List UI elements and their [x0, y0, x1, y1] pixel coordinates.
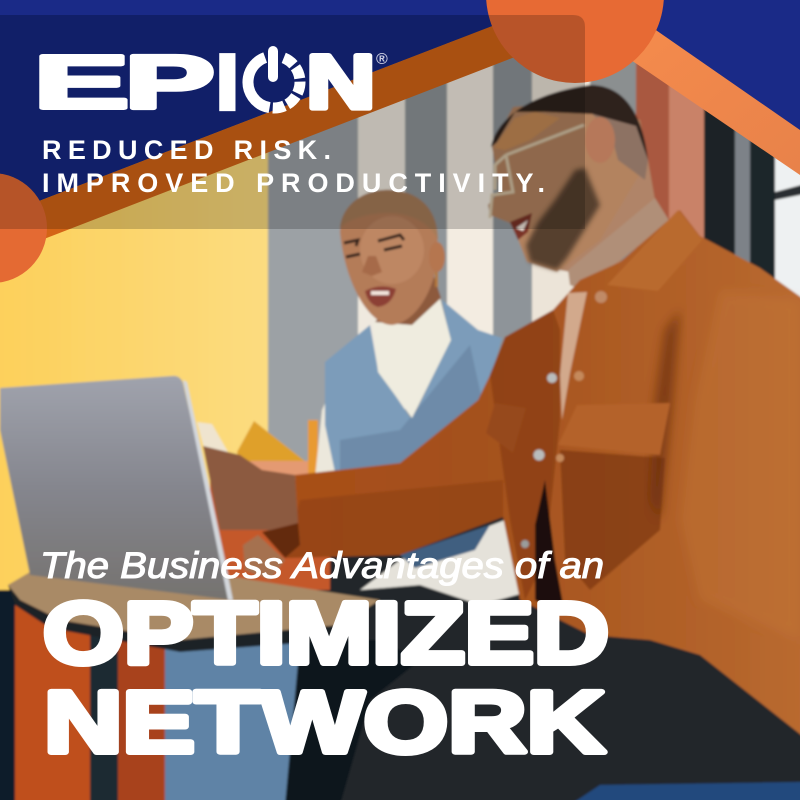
circle: left orange [0, 173, 47, 283]
laptop [0, 376, 380, 652]
wall: grey and cream stripes [268, 30, 638, 490]
pocket flap right [558, 403, 670, 455]
buttons [521, 291, 607, 548]
tagline line one: REDUCED RISK. [42, 135, 331, 165]
beard [526, 168, 600, 270]
forehead highlight [494, 112, 560, 150]
face [488, 100, 648, 272]
jeans peek under arm [400, 525, 490, 568]
ear [585, 117, 615, 163]
logo letter I: I [217, 39, 237, 124]
translucent header panel [0, 15, 585, 229]
buzz hair [340, 190, 438, 240]
logo letter N: N [306, 41, 375, 125]
diagonal stripe: left rust [0, 23, 520, 256]
teeth [371, 291, 389, 295]
cheek sheen [360, 216, 424, 284]
neck [560, 140, 655, 280]
jacket [262, 210, 800, 738]
brows and eyes [344, 235, 404, 257]
trousers and jeans [165, 610, 800, 800]
woman's lower sleeve [360, 520, 535, 605]
nose [362, 256, 382, 276]
woman [315, 190, 502, 480]
tagline [42, 135, 545, 198]
arm shading [285, 480, 503, 558]
logo letter P: P [124, 40, 215, 125]
photo base [0, 500, 800, 800]
table front edge [8, 585, 340, 652]
fade [592, 114, 648, 180]
wall: yellow [0, 60, 270, 680]
headline line two: NETWORK [44, 674, 605, 771]
jacket highlight: right sleeve [680, 290, 800, 640]
smile [516, 220, 528, 231]
ear [429, 242, 445, 272]
jacket shadow: sleeve seam [650, 310, 680, 520]
lid edge [183, 380, 233, 600]
tagline line two: IMPROVED PRODUCTIVITY. [42, 168, 545, 198]
lower room background [0, 420, 330, 800]
header: panel blue [0, 15, 521, 216]
circle: top orange [486, 0, 664, 83]
window and terracotta column [636, 30, 800, 340]
turtleneck [568, 198, 670, 290]
vest shading [340, 345, 482, 476]
man [203, 85, 800, 738]
face [340, 190, 438, 325]
headline line one: OPTIMIZED [43, 585, 609, 682]
cuff [262, 523, 300, 558]
pocket flap left [486, 403, 526, 453]
headline [40, 545, 609, 771]
white sleeve [315, 375, 345, 480]
mouth [510, 213, 532, 240]
jacket shadow: under pocket [560, 450, 665, 590]
other hand [243, 535, 285, 580]
mouth [365, 286, 396, 307]
logo letter E: E [33, 40, 129, 124]
hair [491, 85, 648, 160]
diagonal stripe: right orange [628, 26, 800, 175]
neck [375, 270, 441, 325]
glasses [490, 125, 584, 218]
logo: EPION [33, 39, 388, 125]
lid [0, 376, 232, 600]
hand [203, 446, 298, 530]
earring [435, 272, 438, 287]
table top [8, 572, 380, 640]
jacket gap [535, 480, 565, 615]
collar [607, 210, 702, 291]
top band: blue header [0, 0, 800, 216]
turtleneck [373, 298, 451, 418]
registered mark: ® [376, 51, 388, 68]
inner shirt [560, 292, 587, 420]
jacket shadow: front placket [490, 310, 560, 600]
logo icon: power ring [244, 46, 304, 112]
denim vest [325, 300, 502, 477]
headline kicker: The Business Advantages of an [40, 545, 604, 586]
